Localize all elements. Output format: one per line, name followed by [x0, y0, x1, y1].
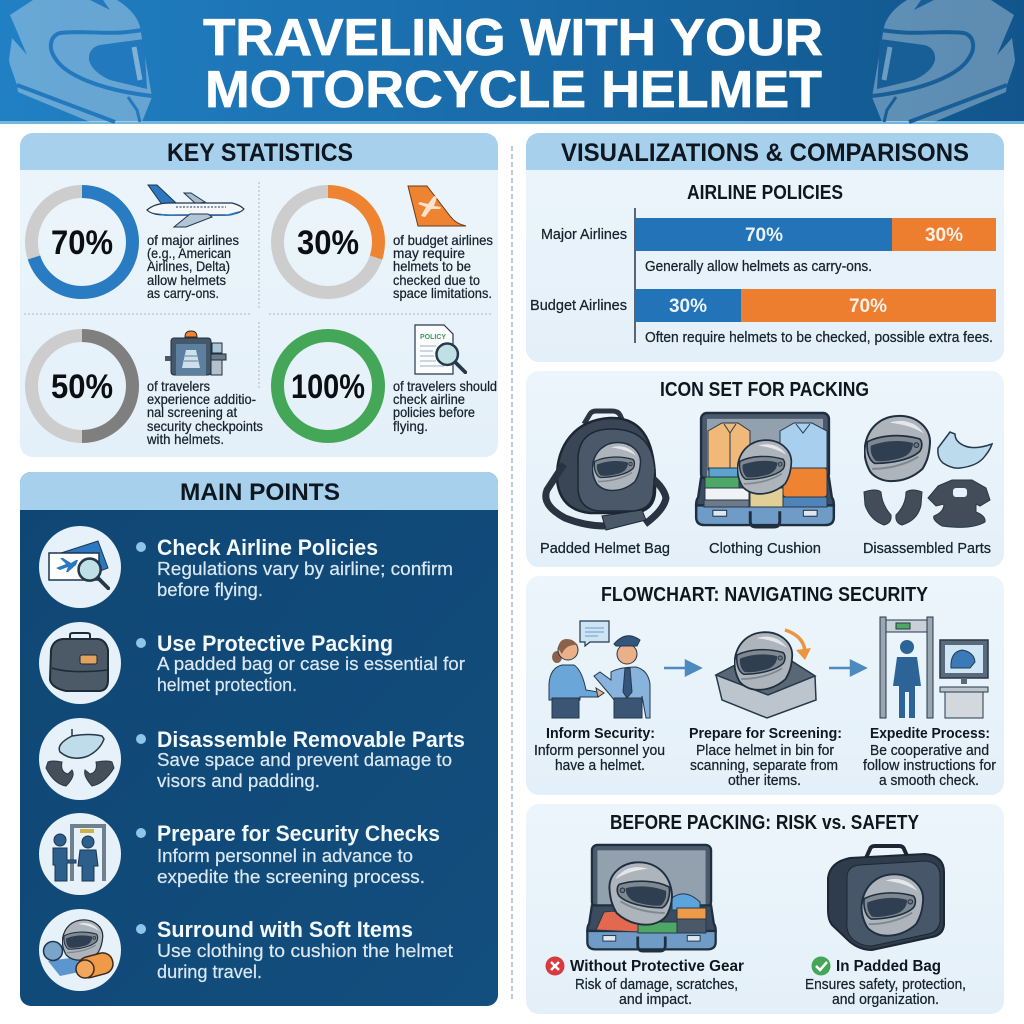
icon: right helmet watermark — [872, 0, 1015, 122]
arrow: step one to two — [664, 661, 700, 675]
arrow: step two to three — [829, 661, 865, 675]
label: clothing cushion: Clothing Cushion — [709, 541, 821, 557]
point: use protective packing: A padded bag or case is essential for — [157, 654, 465, 674]
text: 30% description: may require — [393, 245, 465, 261]
point: check airline policies: before flying. — [157, 580, 263, 600]
text: 50% description: nal screening at — [147, 404, 237, 420]
text: 70% description: of major airlines — [147, 232, 239, 248]
icon: airplane tail — [408, 186, 466, 226]
icon: walk-through scanner and monitor — [880, 617, 988, 718]
icon: traveler speaking to officer — [549, 621, 650, 718]
panel: flowchart navigating security — [526, 576, 1004, 795]
point: surround with soft items: Use clothing to cushion the helmet — [157, 941, 453, 961]
text: prepare for screening — [689, 725, 842, 789]
label: in padded bag — [805, 956, 966, 1008]
icon: x-ray scanner — [165, 331, 226, 375]
bar chart: airline policies: Generally allow helmets as carry-ons. — [645, 259, 872, 275]
icon: disassembled parts — [864, 416, 992, 527]
text: expedite process: a smooth check. — [879, 773, 979, 789]
text: 70% description: (e.g., American — [147, 245, 231, 261]
bar chart: airline policies: 70% — [745, 225, 783, 246]
point: surround with soft items: Surround with Soft Items — [157, 917, 413, 942]
point: disassemble removable parts: visors and padding. — [157, 771, 320, 791]
point: check airline policies: Regulations vary by airline; confirm — [157, 559, 453, 579]
point: check airline policies: Check Airline Policies — [157, 535, 378, 560]
text: inform security: have a helmet. — [555, 758, 645, 774]
panel: before packing risk vs safety — [526, 804, 1004, 1014]
text: 70% description: allow helmets — [147, 272, 226, 288]
point: use protective packing: Use Protective Packing — [157, 631, 393, 656]
point: use protective packing — [39, 622, 465, 704]
heading: icon set: ICON SET FOR PACKING — [660, 379, 869, 401]
heading: flowchart: FLOWCHART: NAVIGATING SECURITY — [601, 584, 929, 606]
text: 70% description — [147, 232, 239, 301]
bar chart: airline policies: 70% — [849, 296, 887, 317]
text: inform security — [534, 725, 665, 774]
text: 30% description: space limitations. — [393, 285, 492, 301]
stat: 70% — [32, 185, 244, 301]
panel: main points — [20, 472, 498, 1006]
text: 30% description: helmets to be — [393, 258, 471, 274]
text: prepare for screening: other items. — [728, 773, 801, 789]
label: without protective gear — [546, 956, 744, 1008]
bar chart: airline policies: Major Airlines — [541, 227, 627, 243]
text: 100% description: of travelers should — [393, 378, 497, 394]
icon: padded helmet bag — [546, 411, 666, 530]
text: 100% description: flying. — [393, 418, 428, 434]
icon: left helmet watermark — [9, 0, 152, 122]
text: 100% description: check airline — [393, 391, 465, 407]
icon: padded bag with helmet — [828, 846, 944, 950]
text: inform security: Inform personnel you — [534, 743, 665, 759]
point: use protective packing: helmet protection. — [157, 675, 297, 695]
text: 50% description: of travelers — [147, 378, 210, 394]
text: expedite process: Be cooperative and — [870, 743, 989, 759]
point: prepare for security checks: Prepare for Security Checks — [157, 821, 440, 846]
point: surround with soft items — [39, 909, 453, 991]
text: 70% description: as carry-ons. — [147, 285, 219, 301]
text: 30% description: checked due to — [393, 272, 480, 288]
label: in padded bag: In Padded Bag — [836, 958, 941, 975]
bar chart: airline policies: 30% — [669, 296, 707, 317]
stat: 50% — [32, 331, 263, 447]
heading: before packing: BEFORE PACKING: RISK vs. SAFETY — [610, 812, 920, 834]
label: in padded bag: and organization. — [832, 992, 939, 1008]
bar chart: airline policies: Budget Airlines — [530, 298, 627, 314]
icon: policy document and magnifier — [415, 325, 465, 374]
point: check airline policies — [39, 526, 453, 608]
heading: key statistics: KEY STATISTICS — [167, 139, 353, 167]
panel: key statistics — [20, 133, 498, 457]
bar chart: airline policies — [530, 208, 996, 346]
heading: visualizations: VISUALIZATIONS & COMPARISONS — [561, 139, 969, 167]
stat: 50%: 50% — [51, 368, 113, 406]
text: expedite process: follow instructions for — [863, 758, 996, 774]
icon: open suitcase without gear — [587, 845, 716, 951]
icon: policy document and magnifier: POLICY — [420, 334, 446, 341]
point: disassemble removable parts — [39, 718, 465, 800]
icon: clothing cushion suitcase — [696, 413, 834, 527]
icon: helmet in screening bin — [716, 630, 816, 718]
point: disassemble removable parts: Disassemble Removable Parts — [157, 727, 465, 752]
bar chart: airline policies: 30% — [925, 225, 963, 246]
text: 100% description — [393, 378, 497, 434]
point: prepare for security checks: Inform personnel in advance to — [157, 846, 413, 866]
label: without protective gear: Risk of damage, scratches, — [575, 977, 738, 993]
panel: visualizations and comparisons — [526, 133, 1004, 362]
heading: main points: MAIN POINTS — [180, 479, 340, 506]
text: 50% description: security checkpoints — [147, 418, 263, 434]
text: 50% description: with helmets. — [146, 431, 224, 447]
label: in padded bag: Ensures safety, protection, — [805, 977, 966, 993]
label: without protective gear: Without Protective Gear — [570, 958, 744, 975]
text: prepare for screening: Place helmet in bin for — [696, 743, 834, 759]
stat: 100%: 100% — [291, 368, 365, 406]
text: prepare for screening: Prepare for Screening: — [689, 725, 842, 742]
point: prepare for security checks — [39, 813, 440, 895]
label: disassembled parts: Disassembled Parts — [863, 541, 991, 557]
point: surround with soft items: during travel. — [157, 962, 262, 982]
stat: 30%: 30% — [297, 224, 359, 262]
label: without protective gear: and impact. — [619, 992, 692, 1008]
title: MOTORCYCLE HELMET — [205, 61, 822, 119]
text: inform security: Inform Security: — [546, 725, 655, 742]
text: expedite process — [863, 725, 996, 789]
stat: 70%: 70% — [51, 224, 113, 262]
text: 50% description: experience additio- — [147, 391, 256, 407]
bar chart: airline policies: Often require helmets to be checked, possible extra fees. — [645, 330, 993, 346]
title: TRAVELING WITH YOUR — [203, 9, 823, 67]
label: padded helmet bag: Padded Helmet Bag — [540, 541, 670, 557]
text: 30% description — [393, 232, 493, 301]
text: 50% description — [146, 378, 263, 447]
text: 30% description: of budget airlines — [393, 232, 493, 248]
point: prepare for security checks: expedite the screening process. — [157, 867, 425, 887]
point: disassemble removable parts: Save space and prevent damage to — [157, 750, 452, 770]
text: 100% description: policies before — [393, 404, 475, 420]
text: expedite process: Expedite Process: — [870, 725, 990, 742]
title — [203, 9, 823, 119]
panel: icon set for packing — [526, 371, 1004, 567]
icon: airplane — [147, 185, 244, 227]
stat: 100% — [278, 325, 497, 436]
text: prepare for screening: scanning, separate from — [690, 758, 838, 774]
stat: 30% — [278, 186, 493, 301]
header banner — [0, 0, 1024, 124]
text: 70% description: Airlines, Delta) — [147, 258, 230, 274]
subheading: airline policies: AIRLINE POLICIES — [687, 182, 843, 204]
